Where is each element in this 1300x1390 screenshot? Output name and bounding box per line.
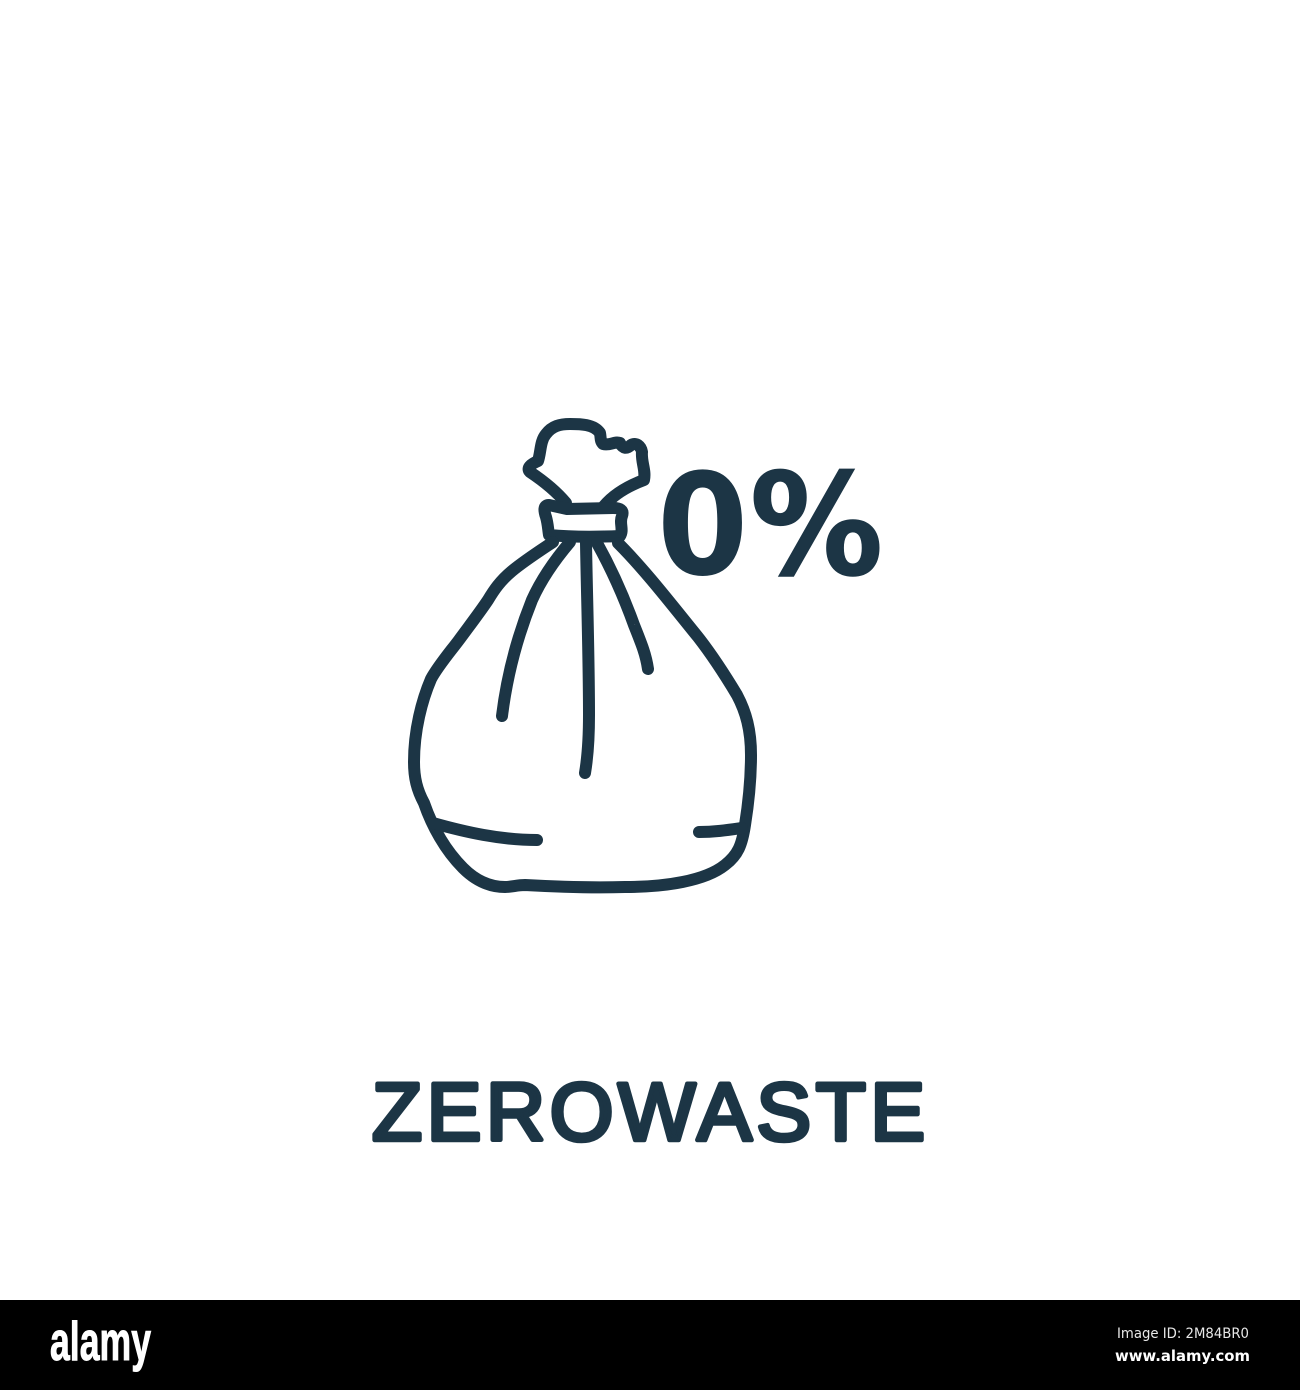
website: www.alamy.com — [1115, 1347, 1250, 1365]
bag fold left — [502, 542, 570, 716]
bag crease bottom left — [433, 823, 537, 840]
footer logo: alamy — [50, 1310, 151, 1372]
bag fold centre — [585, 543, 589, 773]
percentage label: 0 — [657, 445, 748, 608]
bag outline — [414, 542, 751, 887]
footer band — [0, 1300, 1300, 1390]
bag fold right — [597, 543, 648, 669]
image id: Image ID: 2M84BR0 — [1117, 1326, 1249, 1342]
percentage label: % — [750, 444, 883, 608]
icon: tied garbage bag — [414, 424, 751, 887]
bag crease bottom right — [699, 828, 742, 832]
percentage label — [657, 444, 883, 608]
bag knot top — [529, 424, 644, 506]
title: ZEROWASTE — [372, 1067, 930, 1158]
bag tie band — [544, 505, 623, 537]
